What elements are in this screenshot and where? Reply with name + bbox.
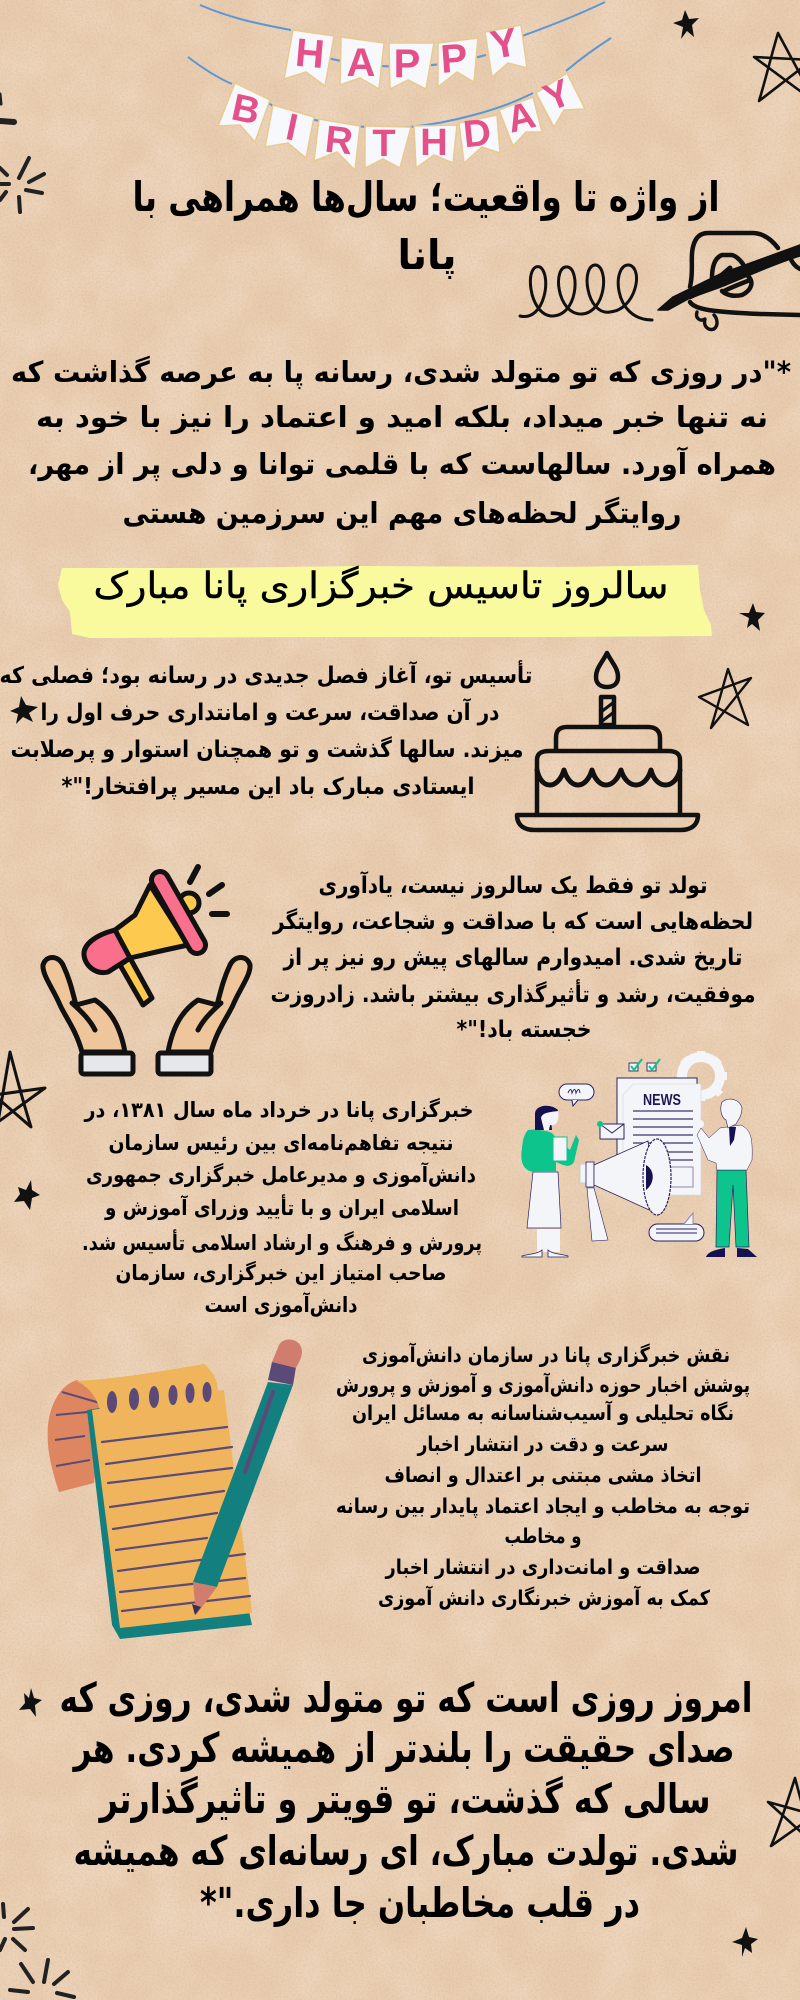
band heading: سالروز تاسیس خبرگزاری پانا مبارک (94, 565, 668, 607)
paragraph: birthday: تولد تو فقط یک سالروز نیست، یادآوری (318, 870, 708, 899)
icon: filled star bottom left (19, 1688, 42, 1717)
closing message (60, 1674, 752, 1927)
paragraph: about agency: اسلامی ایران و با تأیید وزرای آموزش و (104, 1193, 459, 1220)
paragraph: founding: در آن صداقت، سرعت و امانتداری حرف اول را (40, 697, 500, 726)
letters: HAPPY: P (394, 42, 420, 86)
paragraph: about agency: صاحب امتیاز این خبرگزاری، سازمان (116, 1260, 446, 1285)
paragraph: about agency: دانش‌آموزی است (204, 1292, 358, 1317)
letters: HAPPY: H (294, 31, 326, 77)
paragraph: about agency: دانش‌آموزی و مدیرعامل خبرگزاری جمهوری (86, 1162, 476, 1187)
icon: birthday cake (517, 653, 698, 830)
paragraph: role of agency: سرعت و دقت در انتشار اخبار (417, 1432, 668, 1456)
paragraph: birthday: تاریخ شدی. امیدوارم سالهای پیش رو نیز پر از (283, 945, 742, 971)
paragraph: role of agency: اتخاذ مشی مبتنی بر اعتدال و انصاف (384, 1463, 702, 1487)
teal cover (87, 1392, 252, 1639)
back document (617, 1078, 697, 1188)
plate (517, 815, 698, 830)
letters: BIRTHDAY: Y (538, 72, 577, 120)
icon: filled star top (673, 10, 699, 39)
letters: BIRTHDAY: I (282, 106, 301, 150)
illustration: news team with megaphone (521, 1051, 757, 1257)
news label: NEWS (643, 1092, 681, 1109)
paragraph: founding: میزند. سالها گذشت و تو همچنان استوار و پرصلابت (10, 736, 524, 763)
icon: star by band (739, 603, 765, 631)
paragraph: founding (0, 659, 532, 800)
letters: BIRTHDAY: R (323, 119, 355, 163)
icon: sunburst left (0, 158, 44, 212)
paragraph: about agency: نتیجه تفاهم‌نامه‌ای بین رئیس سازمان (108, 1131, 454, 1155)
paragraph: role of agency: صداقت و امانت‌داری در انتشار اخبار (385, 1555, 700, 1579)
woman (521, 1106, 579, 1257)
icing (537, 770, 680, 785)
letters: BIRTHDAY: A (503, 94, 540, 142)
lower string (188, 38, 611, 128)
right hand (168, 958, 250, 1052)
paragraph: about agency: پرورش و فرهنگ و ارشاد اسلامی تأسیس شد. (82, 1228, 482, 1255)
icon: megaphone and hands (43, 867, 250, 1074)
upper string (200, 2, 605, 67)
speech bubble woman (559, 1084, 594, 1106)
icon: filled star left (14, 1180, 40, 1210)
paragraph: role of agency: نقش خبرگزاری پانا در سازمان دانش‌آموزی (362, 1342, 730, 1367)
paragraph: founding: تأسیس تو، آغاز فصل جدیدی در رسانه بود؛ فصلی که (0, 659, 532, 689)
letters: HAPPY: Y (487, 20, 521, 68)
paragraph: role of agency: توجه به مخاطب و ایجاد اعتماد پایدار بین رسانه (336, 1494, 750, 1518)
intro paragraph (11, 355, 791, 530)
paragraph: about agency (82, 1097, 482, 1317)
front bar (160, 880, 197, 945)
icon: sunburst bottom left (0, 1904, 33, 1950)
candle flame (596, 653, 618, 687)
cuffs (81, 1053, 133, 1074)
icon: sunburst bottom (10, 1960, 74, 1997)
yellow highlight band (58, 565, 712, 638)
paragraph: founding: ایستادی مبارک باد این مسیر پرافتخار!"* (62, 774, 474, 800)
speech bubble bottom (649, 1213, 704, 1241)
candle (601, 697, 614, 725)
top tier (556, 727, 660, 750)
page lines (102, 1427, 250, 1611)
page (92, 1390, 252, 1628)
banner: happy birthday bunting (188, 2, 611, 170)
checkboxes (629, 1059, 660, 1071)
paragraph: role of agency (336, 1342, 750, 1610)
intro paragraph: روایتگر لحظه‌های مهم این سرزمین هستی (122, 496, 682, 530)
icon: hand with pen (658, 233, 800, 329)
man (696, 1099, 757, 1257)
paragraph: role of agency: نگاه تحلیلی و آسیب‌شناسانه به مسائل ایران (352, 1400, 734, 1425)
letters: HAPPY: P (439, 36, 469, 82)
icon: outline star bottom right (768, 1778, 800, 1846)
back page (48, 1380, 102, 1492)
flags: HAPPY (284, 25, 527, 89)
letters: BIRTHDAY (228, 72, 577, 165)
rays (190, 867, 227, 914)
title (132, 173, 720, 280)
paragraph: role of agency: و مخاطب (504, 1524, 582, 1548)
icon: left edge marks (0, 94, 14, 122)
back (84, 930, 130, 973)
letters: BIRTHDAY: T (372, 123, 396, 165)
icon: outline star top right (754, 33, 800, 102)
gear (680, 1051, 727, 1101)
letters: HAPPY: A (347, 41, 375, 85)
paragraph: role of agency: کمک به آموزش خبرنگاری دانش آموزی (378, 1585, 710, 1610)
spirals (107, 1382, 212, 1413)
icon: star over founding text (10, 696, 38, 724)
handle (120, 958, 152, 1005)
paragraph: about agency: خبرگزاری پانا در خرداد ماه سال ۱۳۸۱، در (84, 1097, 473, 1122)
envelope (597, 1121, 624, 1139)
letters: BIRTHDAY: B (228, 87, 264, 133)
letters: BIRTHDAY: D (461, 112, 493, 156)
pencil (192, 1340, 302, 1615)
icon: outline star by cake (699, 669, 751, 728)
icon: scribble loops (520, 265, 652, 320)
title: پانا (398, 231, 456, 280)
cone (115, 885, 188, 958)
intro paragraph: نه تنها خبر میداد، بلکه امید و اعتماد را نیز با خود به (36, 400, 768, 434)
bottom tier (537, 751, 680, 813)
icon: filled star bottom right (732, 1927, 758, 1957)
left hand (43, 958, 125, 1052)
megaphone stand (587, 1188, 608, 1241)
paragraph: birthday (270, 870, 756, 1043)
megaphone body (580, 1139, 671, 1215)
paragraph: birthday: خجسته باد!"* (456, 1017, 592, 1043)
flags: BIRTHDAY (218, 73, 585, 170)
closing message: در قلب مخاطبان جا داری."* (200, 1879, 640, 1927)
letters: BIRTHDAY: H (420, 122, 448, 164)
front document (623, 1084, 701, 1195)
top fold (76, 1364, 218, 1410)
document lines (633, 1111, 693, 1169)
letters: HAPPY (294, 20, 521, 86)
icon: outline star left (0, 1052, 45, 1127)
megaphone knob (179, 893, 199, 913)
illustration: notebook and pencil (48, 1340, 302, 1639)
